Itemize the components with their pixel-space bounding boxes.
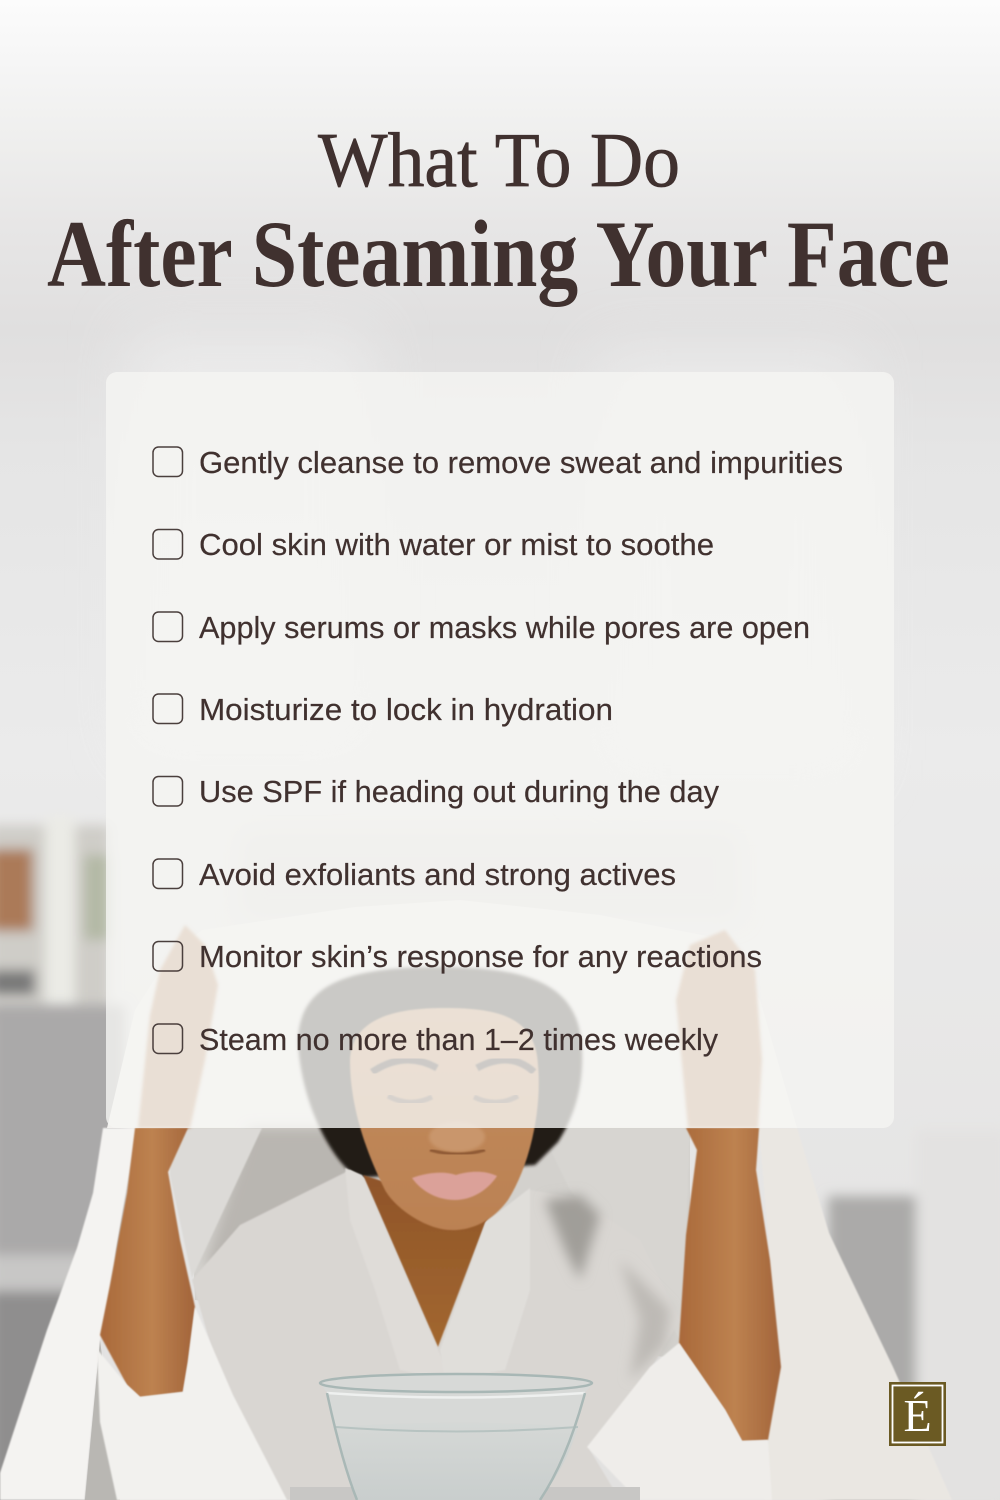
item 8: Steam no more than 1–2 times weekly xyxy=(199,1022,718,1057)
face xyxy=(350,1008,539,1230)
photo: woman steaming her face under a towel xyxy=(0,900,952,1500)
title line 1: What To Do xyxy=(318,117,680,203)
left robe sleeve xyxy=(97,1307,287,1500)
inner towel highlight by left arm xyxy=(170,1128,262,1278)
hair xyxy=(298,967,582,1178)
lips xyxy=(412,1172,497,1200)
table surface xyxy=(290,1487,640,1500)
closed eyes xyxy=(388,1096,432,1102)
blurred grey box on the right xyxy=(828,1130,1000,1500)
blurred grey sofa on the left xyxy=(0,1005,125,1500)
right arm xyxy=(679,1128,781,1441)
translucent checklist panel xyxy=(106,372,894,1128)
brand logo: É xyxy=(903,1390,932,1441)
item 7: Monitor skin’s response for any reactions xyxy=(199,939,762,974)
brand logo xyxy=(889,1382,946,1446)
blurred shelves on the left xyxy=(0,815,110,1025)
robe fold shadows xyxy=(545,1195,600,1280)
title xyxy=(47,117,950,307)
left towel band xyxy=(0,1128,137,1500)
right robe sleeve xyxy=(587,1343,772,1500)
robe lapels xyxy=(345,1168,445,1380)
item 3: Apply serums or masks while pores are open xyxy=(199,610,810,645)
item 2: Cool skin with water or mist to soothe xyxy=(199,527,714,562)
robe xyxy=(192,1170,680,1500)
item 1: Gently cleanse to remove sweat and impurities xyxy=(199,445,843,480)
item 5: Use SPF if heading out during the day xyxy=(199,774,719,809)
checklist xyxy=(153,445,843,1057)
shadow gap between towel and sleeve xyxy=(85,1340,120,1500)
item 4: Moisturize to lock in hydration xyxy=(199,692,613,727)
left arm xyxy=(100,1128,195,1397)
right towel band xyxy=(759,1128,952,1500)
towel draped over head xyxy=(107,900,797,1128)
inner towel by right arm xyxy=(540,1128,690,1343)
eyebrows xyxy=(372,1060,437,1072)
nose xyxy=(429,1122,485,1154)
neck and chest xyxy=(363,1175,490,1347)
item 6: Avoid exfoliants and strong actives xyxy=(199,857,676,892)
hands and forearms seen through the panel xyxy=(138,925,218,1128)
shadowed inner space under towel xyxy=(188,1128,690,1360)
glass bowl of water xyxy=(320,1374,593,1500)
